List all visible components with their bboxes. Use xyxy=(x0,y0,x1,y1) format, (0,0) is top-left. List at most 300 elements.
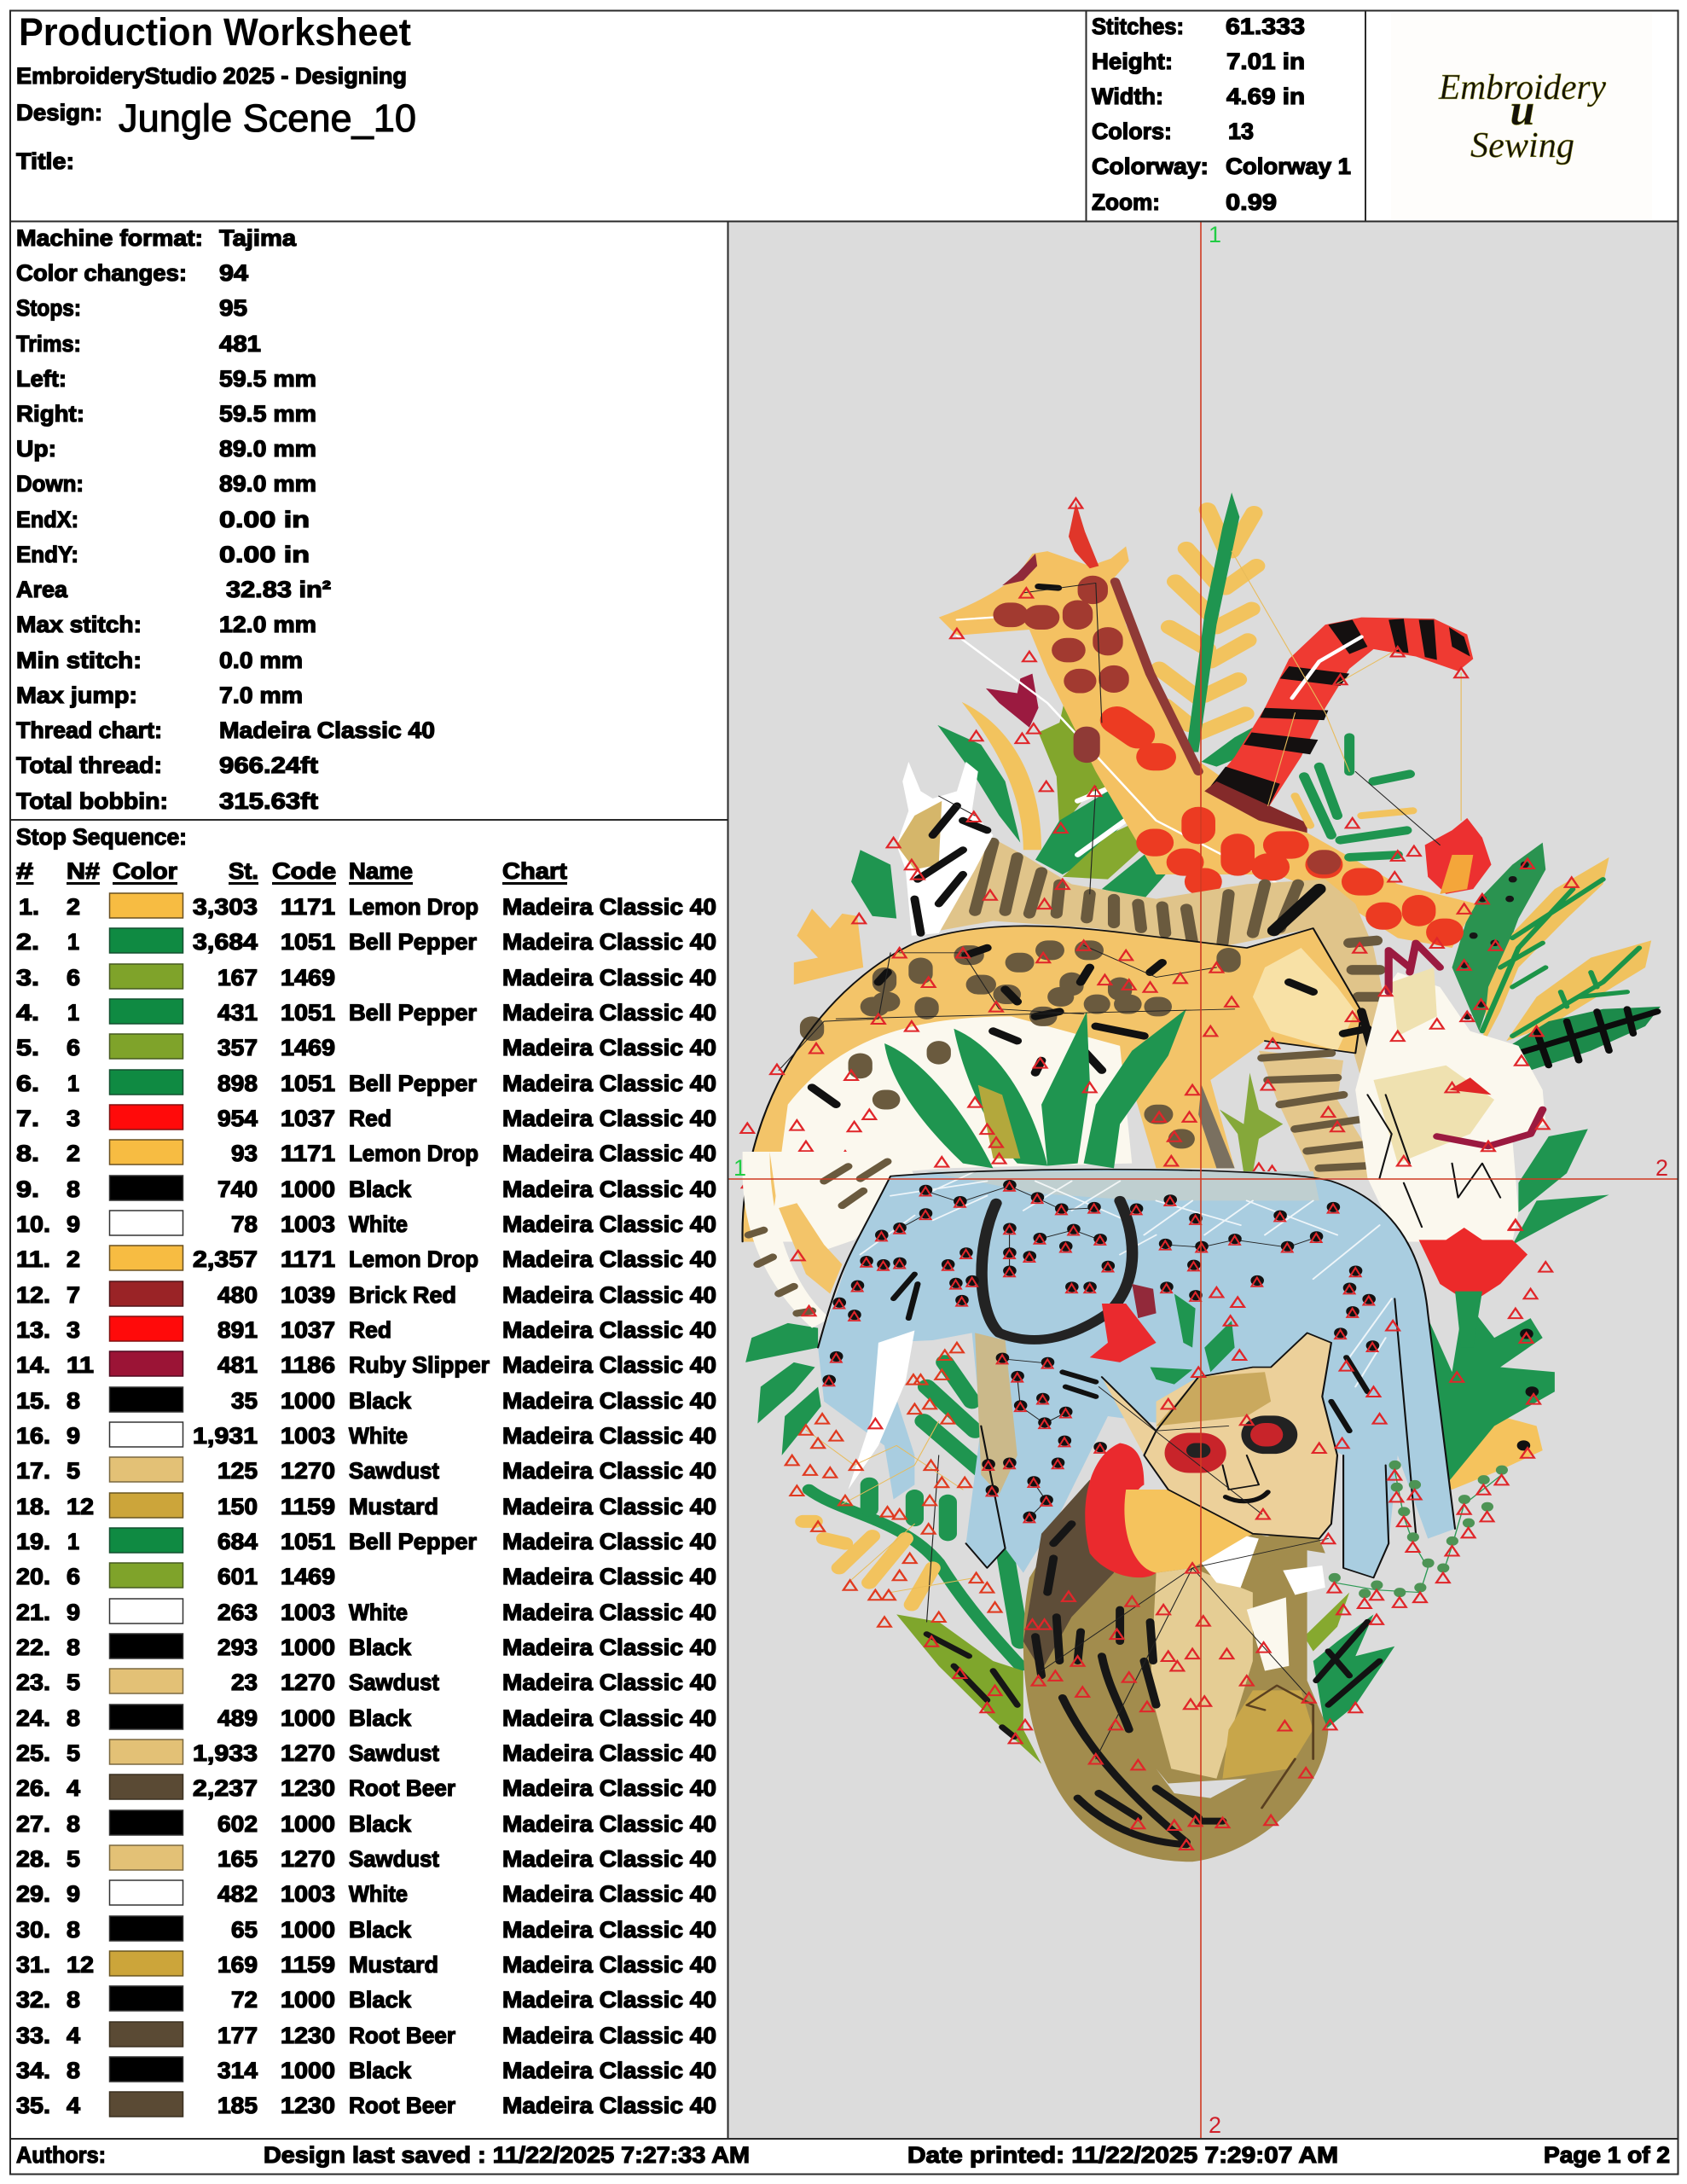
stops xyxy=(16,295,247,321)
row 15: 35 xyxy=(231,1388,258,1414)
row 9: 740 xyxy=(217,1176,258,1202)
total thread: Total thread: xyxy=(16,752,162,778)
row 21: 263 xyxy=(217,1600,258,1625)
row 34: 34. xyxy=(16,2058,50,2083)
brown cat body and tail xyxy=(1023,1480,1328,1862)
row 22: Black xyxy=(349,1635,412,1660)
row 9: 9. xyxy=(16,1176,39,1202)
row 1: 2 xyxy=(67,894,80,920)
row 25: Madeira Classic 40 xyxy=(502,1740,716,1766)
width: Width: xyxy=(1092,84,1163,109)
row 21: 1003 xyxy=(281,1600,335,1625)
table header: # xyxy=(16,858,33,884)
cat face and chest xyxy=(1085,1333,1337,1588)
row 10: 9 xyxy=(67,1211,80,1237)
row 25: 5 xyxy=(67,1740,80,1766)
end x: 0.00 in xyxy=(219,507,310,532)
row 35: 185 xyxy=(217,2093,258,2118)
row 21: 21. xyxy=(16,1600,50,1625)
row 8 xyxy=(16,1140,716,1166)
row 2 xyxy=(16,928,716,955)
row 3 xyxy=(16,964,716,990)
row 26: 4 xyxy=(67,1775,80,1801)
row 12: 480 xyxy=(217,1282,258,1308)
row 34 xyxy=(16,2057,716,2083)
row 33: 1230 xyxy=(281,2023,335,2048)
row 35 xyxy=(16,2092,716,2118)
row 2: Bell Pepper xyxy=(349,929,477,955)
worksheet title: Production Worksheet xyxy=(19,10,411,54)
trims: 481 xyxy=(219,331,261,357)
stitches xyxy=(1092,14,1305,39)
row 3: 3. xyxy=(16,965,39,990)
row 12 xyxy=(16,1281,716,1308)
row 31: 169 xyxy=(217,1952,258,1978)
row 21: White xyxy=(349,1600,408,1625)
stitches: Stitches: xyxy=(1092,14,1184,39)
row 5: 1469 xyxy=(281,1035,335,1060)
total bobbin: 315.63ft xyxy=(219,788,318,814)
row 16: White xyxy=(349,1423,408,1449)
row 29: 9 xyxy=(67,1881,80,1907)
left: 59.5 mm xyxy=(219,366,316,392)
row 24: 1000 xyxy=(281,1705,335,1731)
row 25 xyxy=(16,1740,716,1766)
row 12: Brick Red xyxy=(349,1282,456,1308)
row 3: 1469 xyxy=(281,965,335,990)
row 30: 65 xyxy=(231,1917,258,1943)
row 30: Madeira Classic 40 xyxy=(502,1917,716,1943)
row 19: Madeira Classic 40 xyxy=(502,1529,716,1554)
thread chart xyxy=(16,717,435,743)
row 30: Black xyxy=(349,1917,412,1943)
trims xyxy=(16,331,261,357)
total bobbin xyxy=(16,788,318,814)
row 6: 1051 xyxy=(281,1071,335,1096)
end y: 0.00 in xyxy=(219,542,310,567)
row 2: 1051 xyxy=(281,929,335,955)
row 7: 954 xyxy=(217,1106,258,1131)
up: 89.0 mm xyxy=(219,436,316,462)
blue elephant xyxy=(818,1170,1455,1577)
table header xyxy=(16,858,567,884)
row 35: 1230 xyxy=(281,2093,335,2118)
row 9: 8 xyxy=(67,1176,80,1202)
trims: Trims: xyxy=(16,331,81,357)
row 15: Madeira Classic 40 xyxy=(502,1388,716,1414)
row 9: 1000 xyxy=(281,1176,335,1202)
stop sequence heading: Stop Sequence: xyxy=(16,824,187,850)
row 14: 1186 xyxy=(281,1352,335,1378)
row 6: Bell Pepper xyxy=(349,1071,477,1096)
row 13: 13. xyxy=(16,1317,50,1343)
up xyxy=(16,436,316,462)
thread chart: Madeira Classic 40 xyxy=(219,717,435,743)
row 21: Madeira Classic 40 xyxy=(502,1600,716,1625)
table header: N# xyxy=(67,858,100,884)
row 18: 1159 xyxy=(281,1494,335,1519)
row 1: 1171 xyxy=(281,894,335,920)
row 16: Madeira Classic 40 xyxy=(502,1423,716,1449)
color changes: Color changes: xyxy=(16,260,187,286)
row 13: Red xyxy=(349,1317,391,1343)
row 17: 125 xyxy=(217,1458,258,1484)
up: Up: xyxy=(16,436,56,462)
row 14 xyxy=(16,1351,716,1378)
leopard xyxy=(743,926,1373,1241)
row 15: 1000 xyxy=(281,1388,335,1414)
row 10: 1003 xyxy=(281,1211,335,1237)
min stitch xyxy=(16,648,303,673)
crosshair label: top 1: 1 xyxy=(1209,222,1221,247)
area: Area xyxy=(16,577,68,602)
table header: Color xyxy=(113,858,178,884)
row 22: 8 xyxy=(67,1635,80,1660)
row 5 xyxy=(16,1034,716,1060)
row 24: Madeira Classic 40 xyxy=(502,1705,716,1731)
row 21: 9 xyxy=(67,1600,80,1625)
row 23: 5 xyxy=(67,1670,80,1695)
row 8: 1171 xyxy=(281,1141,335,1166)
row 29: Madeira Classic 40 xyxy=(502,1881,716,1907)
row 28: Madeira Classic 40 xyxy=(502,1846,716,1872)
row 33: Root Beer xyxy=(349,2023,455,2048)
green bead markers right xyxy=(1334,1465,1502,1594)
panel: machine statistics xyxy=(16,225,435,814)
row 19: Bell Pepper xyxy=(349,1529,477,1554)
red tulip xyxy=(1425,818,1492,894)
zoom: 0.99 xyxy=(1226,189,1277,215)
row 11: 11. xyxy=(16,1246,50,1272)
row 10: White xyxy=(349,1211,408,1237)
row 35: 35. xyxy=(16,2093,50,2118)
page number: Page 1 of 2 xyxy=(1544,2142,1670,2168)
row 17: 5 xyxy=(67,1458,80,1484)
row 10: 10. xyxy=(16,1211,50,1237)
height: 7.01 in xyxy=(1226,49,1305,74)
max stitch: 12.0 mm xyxy=(219,612,316,637)
row 13 xyxy=(16,1316,716,1343)
design name: Jungle Scene_10 xyxy=(119,96,416,140)
row 19: 1 xyxy=(67,1529,79,1554)
white rabbit xyxy=(1355,943,1545,1241)
row 23: Sawdust xyxy=(349,1670,439,1695)
row 34: 314 xyxy=(217,2058,258,2083)
row 3: 6 xyxy=(67,965,80,990)
row 6: Madeira Classic 40 xyxy=(502,1071,716,1096)
row 27: 602 xyxy=(217,1811,258,1837)
panel: header xyxy=(16,10,416,174)
row 26: 1230 xyxy=(281,1775,335,1801)
row 4 xyxy=(16,999,716,1025)
row 13: 3 xyxy=(67,1317,80,1343)
row 26: 26. xyxy=(16,1775,50,1801)
thread chart: Thread chart: xyxy=(16,717,162,743)
row 24: 24. xyxy=(16,1705,50,1731)
software line: EmbroideryStudio 2025 - Designing xyxy=(16,63,407,89)
row 23: 23 xyxy=(231,1670,258,1695)
row 7: 1037 xyxy=(281,1106,335,1131)
row 12: 12. xyxy=(16,1282,50,1308)
row 6: 898 xyxy=(217,1071,258,1096)
row 4: 4. xyxy=(16,1000,39,1025)
row 26: Madeira Classic 40 xyxy=(502,1775,716,1801)
stops: Stops: xyxy=(16,295,81,321)
row 5: 5. xyxy=(16,1035,39,1060)
row 27: 1000 xyxy=(281,1811,335,1837)
authors: Authors: xyxy=(16,2142,106,2168)
panel: design preview xyxy=(728,221,1678,2139)
row 10: Madeira Classic 40 xyxy=(502,1211,716,1237)
row 13: 891 xyxy=(217,1317,258,1343)
row 1 xyxy=(19,893,716,920)
row 31: 1159 xyxy=(281,1952,335,1978)
row 20 xyxy=(16,1563,716,1589)
row 19: 1051 xyxy=(281,1529,335,1554)
row 11: Lemon Drop xyxy=(349,1246,478,1272)
row 16: 9 xyxy=(67,1423,80,1449)
row 31 xyxy=(16,1951,716,1978)
logo: Embroidery n Sewing: Embroidery xyxy=(1438,68,1606,107)
embroidery artwork: upper half xyxy=(740,492,1661,1241)
row 4: Madeira Classic 40 xyxy=(502,1000,716,1025)
bottom right dark leaf xyxy=(1304,1593,1394,1729)
row 31: 31. xyxy=(16,1952,50,1978)
row 9 xyxy=(16,1176,716,1202)
row 31: Mustard xyxy=(349,1952,438,1978)
row 5: 6 xyxy=(67,1035,80,1060)
row 18: 150 xyxy=(217,1494,258,1519)
row 20: 1469 xyxy=(281,1564,335,1589)
row 20: 601 xyxy=(217,1564,258,1589)
total bobbin: Total bobbin: xyxy=(16,788,168,814)
striped tiger leg xyxy=(1198,1051,1373,1178)
row 1: Madeira Classic 40 xyxy=(502,894,716,920)
total thread xyxy=(16,752,318,778)
down: Down: xyxy=(16,471,84,497)
connector threads lower xyxy=(900,1186,1328,1759)
row 34: 1000 xyxy=(281,2058,335,2083)
row 13: Madeira Classic 40 xyxy=(502,1317,716,1343)
row 24: 489 xyxy=(217,1705,258,1731)
row 22: 1000 xyxy=(281,1635,335,1660)
row 22 xyxy=(16,1634,716,1660)
row 2: Madeira Classic 40 xyxy=(502,929,716,955)
colors xyxy=(1092,119,1254,144)
row 6 xyxy=(16,1070,716,1096)
row 14: 11 xyxy=(67,1352,94,1378)
row 35: 4 xyxy=(67,2093,80,2118)
width: 4.69 in xyxy=(1226,84,1305,109)
table header: Name xyxy=(349,858,413,884)
table header: Chart xyxy=(502,858,567,884)
row 27: Black xyxy=(349,1811,412,1837)
max stitch xyxy=(16,612,316,637)
right xyxy=(16,401,316,427)
row 17: 17. xyxy=(16,1458,50,1484)
max jump xyxy=(16,682,303,708)
row 18: Madeira Classic 40 xyxy=(502,1494,716,1519)
red stop markers on cat xyxy=(791,1220,1552,1850)
black stitch clusters xyxy=(829,1185,1533,1517)
row 34: Black xyxy=(349,2058,412,2083)
panel: footer xyxy=(16,2142,1670,2168)
giraffe xyxy=(939,502,1476,948)
red stop markers on elephant xyxy=(823,1182,1377,1523)
down xyxy=(16,471,316,497)
row 4: Bell Pepper xyxy=(349,1000,477,1025)
row 7: 7. xyxy=(16,1106,39,1131)
row 4: 431 xyxy=(217,1000,258,1025)
row 8: Lemon Drop xyxy=(349,1141,478,1166)
crosshair label: right 2: 2 xyxy=(1655,1155,1668,1181)
small leaf sprays xyxy=(1295,737,1412,857)
green grass blades xyxy=(884,1009,1186,1168)
row 12: 7 xyxy=(67,1282,80,1308)
row 11: 2,357 xyxy=(193,1246,258,1272)
row 18 xyxy=(16,1493,716,1519)
row 11: Madeira Classic 40 xyxy=(502,1246,716,1272)
max stitch: Max stitch: xyxy=(16,612,142,637)
row 4: 1051 xyxy=(281,1000,335,1025)
end y: EndY: xyxy=(16,542,78,567)
row 18: 12 xyxy=(67,1494,94,1519)
row 7: 3 xyxy=(67,1106,80,1131)
row 3: 167 xyxy=(217,965,258,990)
row 14: Madeira Classic 40 xyxy=(502,1352,716,1378)
row 5: 357 xyxy=(217,1035,258,1060)
connector threads upper xyxy=(779,583,1440,1071)
row 28 xyxy=(16,1845,716,1872)
row 31: 12 xyxy=(67,1952,94,1978)
date printed: Date printed: 11/22/2025 7:29:07 AM xyxy=(907,2142,1338,2168)
row 30: 8 xyxy=(67,1917,80,1943)
colorway: Colorway 1 xyxy=(1226,154,1351,179)
row 10 xyxy=(16,1211,716,1237)
row 33: 33. xyxy=(16,2023,50,2048)
machine format: Machine format: xyxy=(16,225,203,251)
row 11: 1171 xyxy=(281,1246,335,1272)
colorway: Colorway: xyxy=(1092,154,1209,179)
row 32: 72 xyxy=(231,1987,258,2013)
colorway xyxy=(1092,154,1351,179)
width xyxy=(1092,84,1305,109)
row 29 xyxy=(16,1880,716,1907)
right: Right: xyxy=(16,401,84,427)
row 27: 8 xyxy=(67,1811,80,1837)
row 20: 20. xyxy=(16,1564,50,1589)
end y xyxy=(16,542,310,567)
row 20: 6 xyxy=(67,1564,80,1589)
row 1: 1. xyxy=(19,894,39,920)
row 7 xyxy=(16,1105,716,1131)
row 33 xyxy=(16,2022,716,2048)
row 33: 177 xyxy=(217,2023,258,2048)
colors: 13 xyxy=(1228,119,1254,144)
orange and red markers lower left xyxy=(786,1343,1001,1627)
row 25: 1,933 xyxy=(193,1740,258,1766)
machine format: Tajima xyxy=(219,225,297,251)
row 14: Ruby Slipper xyxy=(349,1352,490,1378)
striped red tail xyxy=(1204,618,1473,833)
right: 59.5 mm xyxy=(219,401,316,427)
row 9: Madeira Classic 40 xyxy=(502,1176,716,1202)
left leaf cluster xyxy=(794,850,896,985)
row 13: 1037 xyxy=(281,1317,335,1343)
right lower leaves xyxy=(1518,1129,1588,1212)
row 12: Madeira Classic 40 xyxy=(502,1282,716,1308)
row 35: Root Beer xyxy=(349,2093,455,2118)
row 14: 14. xyxy=(16,1352,50,1378)
row 5: Madeira Classic 40 xyxy=(502,1035,716,1060)
colors: Colors: xyxy=(1092,119,1172,144)
row 16: 16. xyxy=(16,1423,50,1449)
row 4: 1 xyxy=(67,1000,79,1025)
row 7: Madeira Classic 40 xyxy=(502,1106,716,1131)
machine format xyxy=(16,225,297,251)
row 15: Black xyxy=(349,1388,412,1414)
row 1: Lemon Drop xyxy=(349,894,478,920)
row 11 xyxy=(16,1246,716,1272)
row 28: 28. xyxy=(16,1846,50,1872)
red flower and leaves xyxy=(1090,1284,1235,1385)
end x xyxy=(16,507,310,532)
row 16: 1,931 xyxy=(193,1423,258,1449)
row 23 xyxy=(16,1669,716,1695)
row 32: 32. xyxy=(16,1987,50,2013)
embroidery artwork: lower half xyxy=(743,1152,1609,1862)
row 7: Red xyxy=(349,1106,391,1131)
row 19: 19. xyxy=(16,1529,50,1554)
row 16: 1003 xyxy=(281,1423,335,1449)
row 8: 93 xyxy=(231,1141,258,1166)
row 24: 8 xyxy=(67,1705,80,1731)
title label: Title: xyxy=(16,148,74,174)
row 34: Madeira Classic 40 xyxy=(502,2058,716,2083)
row 32 xyxy=(16,1986,716,2013)
design last saved: Design last saved : 11/22/2025 7:27:33 AM xyxy=(264,2142,750,2168)
left green fans xyxy=(745,1323,1020,1666)
right leaves xyxy=(1452,843,1661,1071)
row 33: Madeira Classic 40 xyxy=(502,2023,716,2048)
table header: St. xyxy=(229,858,258,884)
row 22: 293 xyxy=(217,1635,258,1660)
row 8: 8. xyxy=(16,1141,39,1166)
row 17: 1270 xyxy=(281,1458,335,1484)
height xyxy=(1092,49,1305,74)
logo: Embroidery n Sewing: u xyxy=(1510,86,1534,135)
row 9: Black xyxy=(349,1176,412,1202)
row 20: Madeira Classic 40 xyxy=(502,1564,716,1589)
left: Left: xyxy=(16,366,67,392)
row 8: Madeira Classic 40 xyxy=(502,1141,716,1166)
row 28: 165 xyxy=(217,1846,258,1872)
row 28: 1270 xyxy=(281,1846,335,1872)
total thread: 966.24ft xyxy=(219,752,318,778)
row 2: 2. xyxy=(16,929,39,955)
row 26: Root Beer xyxy=(349,1775,455,1801)
row 17 xyxy=(16,1457,716,1484)
row 3: Madeira Classic 40 xyxy=(502,965,716,990)
row 28: Sawdust xyxy=(349,1846,439,1872)
max jump: Max jump: xyxy=(16,682,137,708)
logo: Embroidery n Sewing: Sewing xyxy=(1470,126,1574,166)
area xyxy=(16,577,331,602)
left xyxy=(16,366,316,392)
leopard tail and belly xyxy=(743,1152,914,1328)
stitches: 61.333 xyxy=(1226,14,1305,39)
row 30: 1000 xyxy=(281,1917,335,1943)
